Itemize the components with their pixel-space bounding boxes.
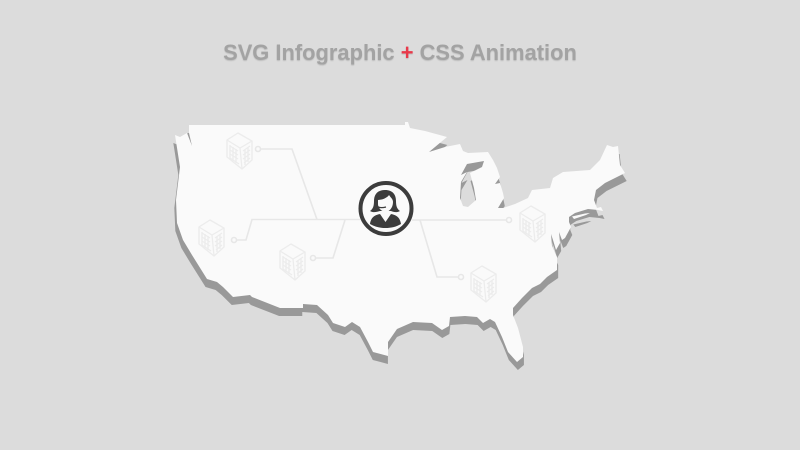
map surface <box>175 122 625 362</box>
icon: building south central <box>280 244 305 280</box>
title: SVG Infographic + CSS Animation <box>223 40 577 65</box>
map of the United States <box>173 122 627 370</box>
icon: building east <box>520 206 545 242</box>
icon: support agent <box>360 183 412 234</box>
icon: building northwest <box>227 133 252 169</box>
icon: building southwest <box>199 220 224 256</box>
icon: building southeast <box>471 266 496 302</box>
connector lines <box>232 146 512 280</box>
map shadow <box>173 130 627 370</box>
